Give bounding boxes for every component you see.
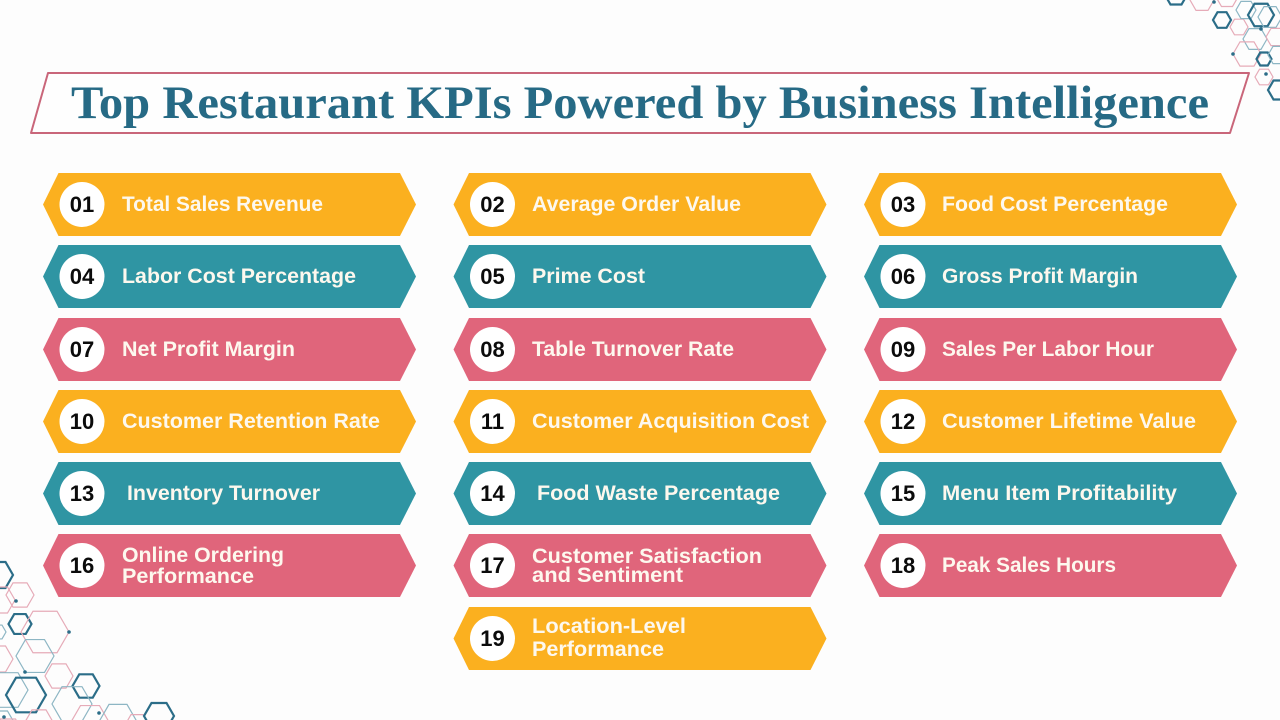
KPI 14: 14 — [480, 481, 505, 506]
KPI 04 — [43, 245, 416, 308]
KPI 15 — [864, 462, 1237, 525]
KPI 19 — [454, 607, 826, 670]
KPI 02: 02 — [480, 192, 505, 217]
KPI 18 — [864, 534, 1237, 597]
KPI 06: Gross Profit Margin — [942, 265, 1138, 288]
KPI 19: 19 — [480, 626, 505, 651]
KPI 17: Customer Satisfaction — [532, 545, 762, 568]
KPI 10: 10 — [70, 409, 94, 434]
KPI 01: Total Sales Revenue — [122, 193, 323, 216]
KPI 07: 07 — [70, 337, 94, 362]
KPI 12: 12 — [891, 409, 915, 434]
KPI 10: Customer Retention Rate — [122, 410, 380, 433]
KPI 15: Menu Item Profitability — [942, 482, 1177, 505]
KPI 19: Performance — [532, 638, 664, 661]
KPI 01 — [43, 173, 416, 236]
KPI 16: Online Ordering — [122, 544, 284, 567]
KPI 05: Prime Cost — [532, 265, 645, 288]
KPI 08 — [454, 318, 826, 381]
KPI 03: 03 — [891, 192, 915, 217]
KPI 09: Sales Per Labor Hour — [942, 338, 1154, 361]
KPI 16: 16 — [70, 553, 94, 578]
KPI 11: 11 — [481, 409, 504, 434]
title banner — [31, 73, 1249, 133]
KPI 15: 15 — [891, 481, 915, 506]
KPI 13: Inventory Turnover — [127, 482, 320, 505]
KPI 11: Customer Acquisition Cost — [532, 410, 809, 433]
KPI 08: 08 — [480, 337, 505, 362]
KPI 16: Performance — [122, 565, 254, 588]
title: Top Restaurant KPIs Powered by Business Intelligence — [71, 77, 1209, 129]
KPI 14: Food Waste Percentage — [537, 482, 780, 505]
KPI 04: 04 — [70, 264, 95, 289]
KPI 10 — [43, 390, 416, 453]
KPI 06: 06 — [891, 264, 915, 289]
KPI 17 — [454, 534, 826, 597]
decoration: hexagon cluster top right — [1165, 0, 1280, 100]
KPI 09: 09 — [891, 337, 915, 362]
KPI 09 — [864, 318, 1237, 381]
KPI 07: Net Profit Margin — [122, 338, 295, 361]
KPI 08: Table Turnover Rate — [532, 338, 734, 361]
KPI 03: Food Cost Percentage — [942, 193, 1168, 216]
KPI 03 — [864, 173, 1237, 236]
KPI 18: Peak Sales Hours — [942, 554, 1116, 577]
KPI 18: 18 — [891, 553, 915, 578]
KPI 19: Location-Level — [532, 615, 686, 638]
KPI 12 — [864, 390, 1237, 453]
KPI 14 — [454, 462, 826, 525]
KPI 17: 17 — [480, 553, 505, 578]
KPI 05 — [454, 245, 826, 308]
decoration: hexagon cluster bottom left — [0, 562, 174, 720]
KPI 13 — [43, 462, 416, 525]
KPI 07 — [43, 318, 416, 381]
KPI 02 — [454, 173, 826, 236]
KPI 16 — [43, 534, 416, 597]
KPI 06 — [864, 245, 1237, 308]
KPI 05: 05 — [480, 264, 505, 289]
KPI 17: and Sentiment — [532, 564, 683, 587]
KPI 12: Customer Lifetime Value — [942, 410, 1196, 433]
KPI 13: 13 — [70, 481, 94, 506]
KPI 01: 01 — [70, 192, 94, 217]
KPI 11 — [454, 390, 826, 453]
KPI 04: Labor Cost Percentage — [122, 265, 356, 288]
KPI 02: Average Order Value — [532, 193, 741, 216]
